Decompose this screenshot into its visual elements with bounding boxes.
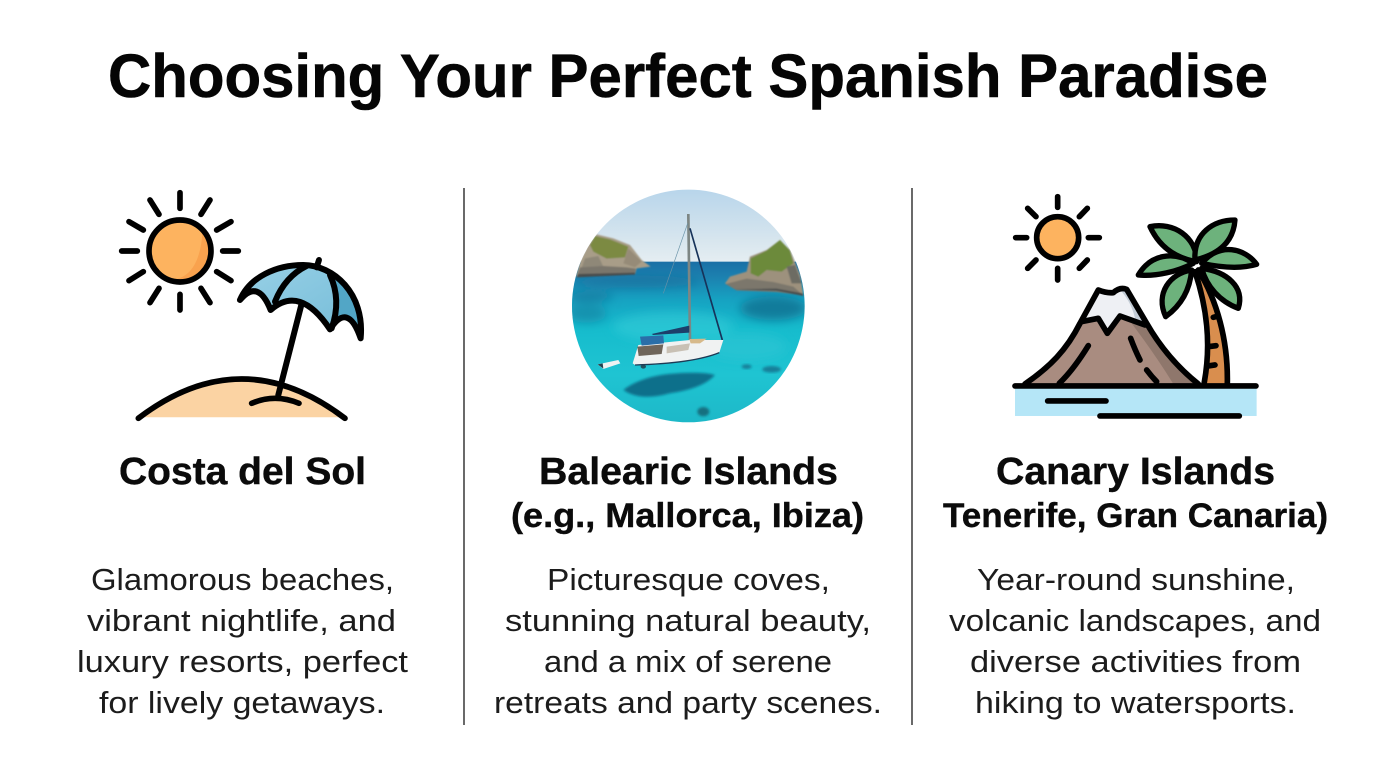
heading: Costa del Sol: Costa del Sol [119, 451, 366, 493]
heading: Balearic Islands: Balearic Islands [539, 451, 838, 493]
title: Choosing Your Perfect Spanish Paradise [108, 42, 1268, 110]
hull and sails [652, 326, 689, 335]
icon: sun, volcano and palm tree [1015, 197, 1257, 416]
subheading: Mallorca, Ibiza: (e.g., Mallorca, Ibiza) [511, 497, 864, 535]
description: Balearic Islands: and a mix of serene [544, 644, 832, 679]
description: Costa del Sol [77, 562, 408, 720]
icon: sun and beach umbrella [122, 193, 361, 418]
panel: Canary Islands [943, 197, 1328, 720]
description: Canary Islands: volcanic landscapes, and [949, 603, 1321, 638]
description: Costa del Sol: for lively getaways. [99, 685, 385, 720]
subheading: Tenerife, Gran Canaria: Tenerife, Gran Canaria) [943, 497, 1328, 535]
description: Canary Islands: diverse activities from [970, 644, 1301, 679]
description: Balearic Islands: stunning natural beauty, [505, 603, 871, 638]
photo: sailboat in turquoise cove [572, 190, 805, 422]
description: Canary Islands: hiking to watersports. [975, 685, 1296, 720]
left headland [576, 234, 651, 277]
right headland [725, 240, 803, 296]
description: Balearic Islands: Picturesque coves, [547, 562, 830, 597]
description: Canary Islands: Year-round sunshine, [977, 562, 1295, 597]
panel: Balearic Islands [494, 180, 882, 720]
description: Balearic Islands [494, 562, 882, 720]
dinghy [598, 360, 620, 369]
boat shadow [623, 373, 715, 397]
description: Costa del Sol: Glamorous beaches, [91, 562, 394, 597]
description: Canary Islands [949, 562, 1321, 720]
description: Costa del Sol: vibrant nightlife, and [87, 603, 396, 638]
panel: Costa del Sol [77, 193, 408, 720]
description: Balearic Islands: retreats and party scenes. [494, 685, 882, 720]
rigging [688, 214, 690, 340]
heading: Canary Islands: Canary Islands [996, 451, 1275, 493]
description: Costa del Sol: luxury resorts, perfect [77, 644, 408, 679]
